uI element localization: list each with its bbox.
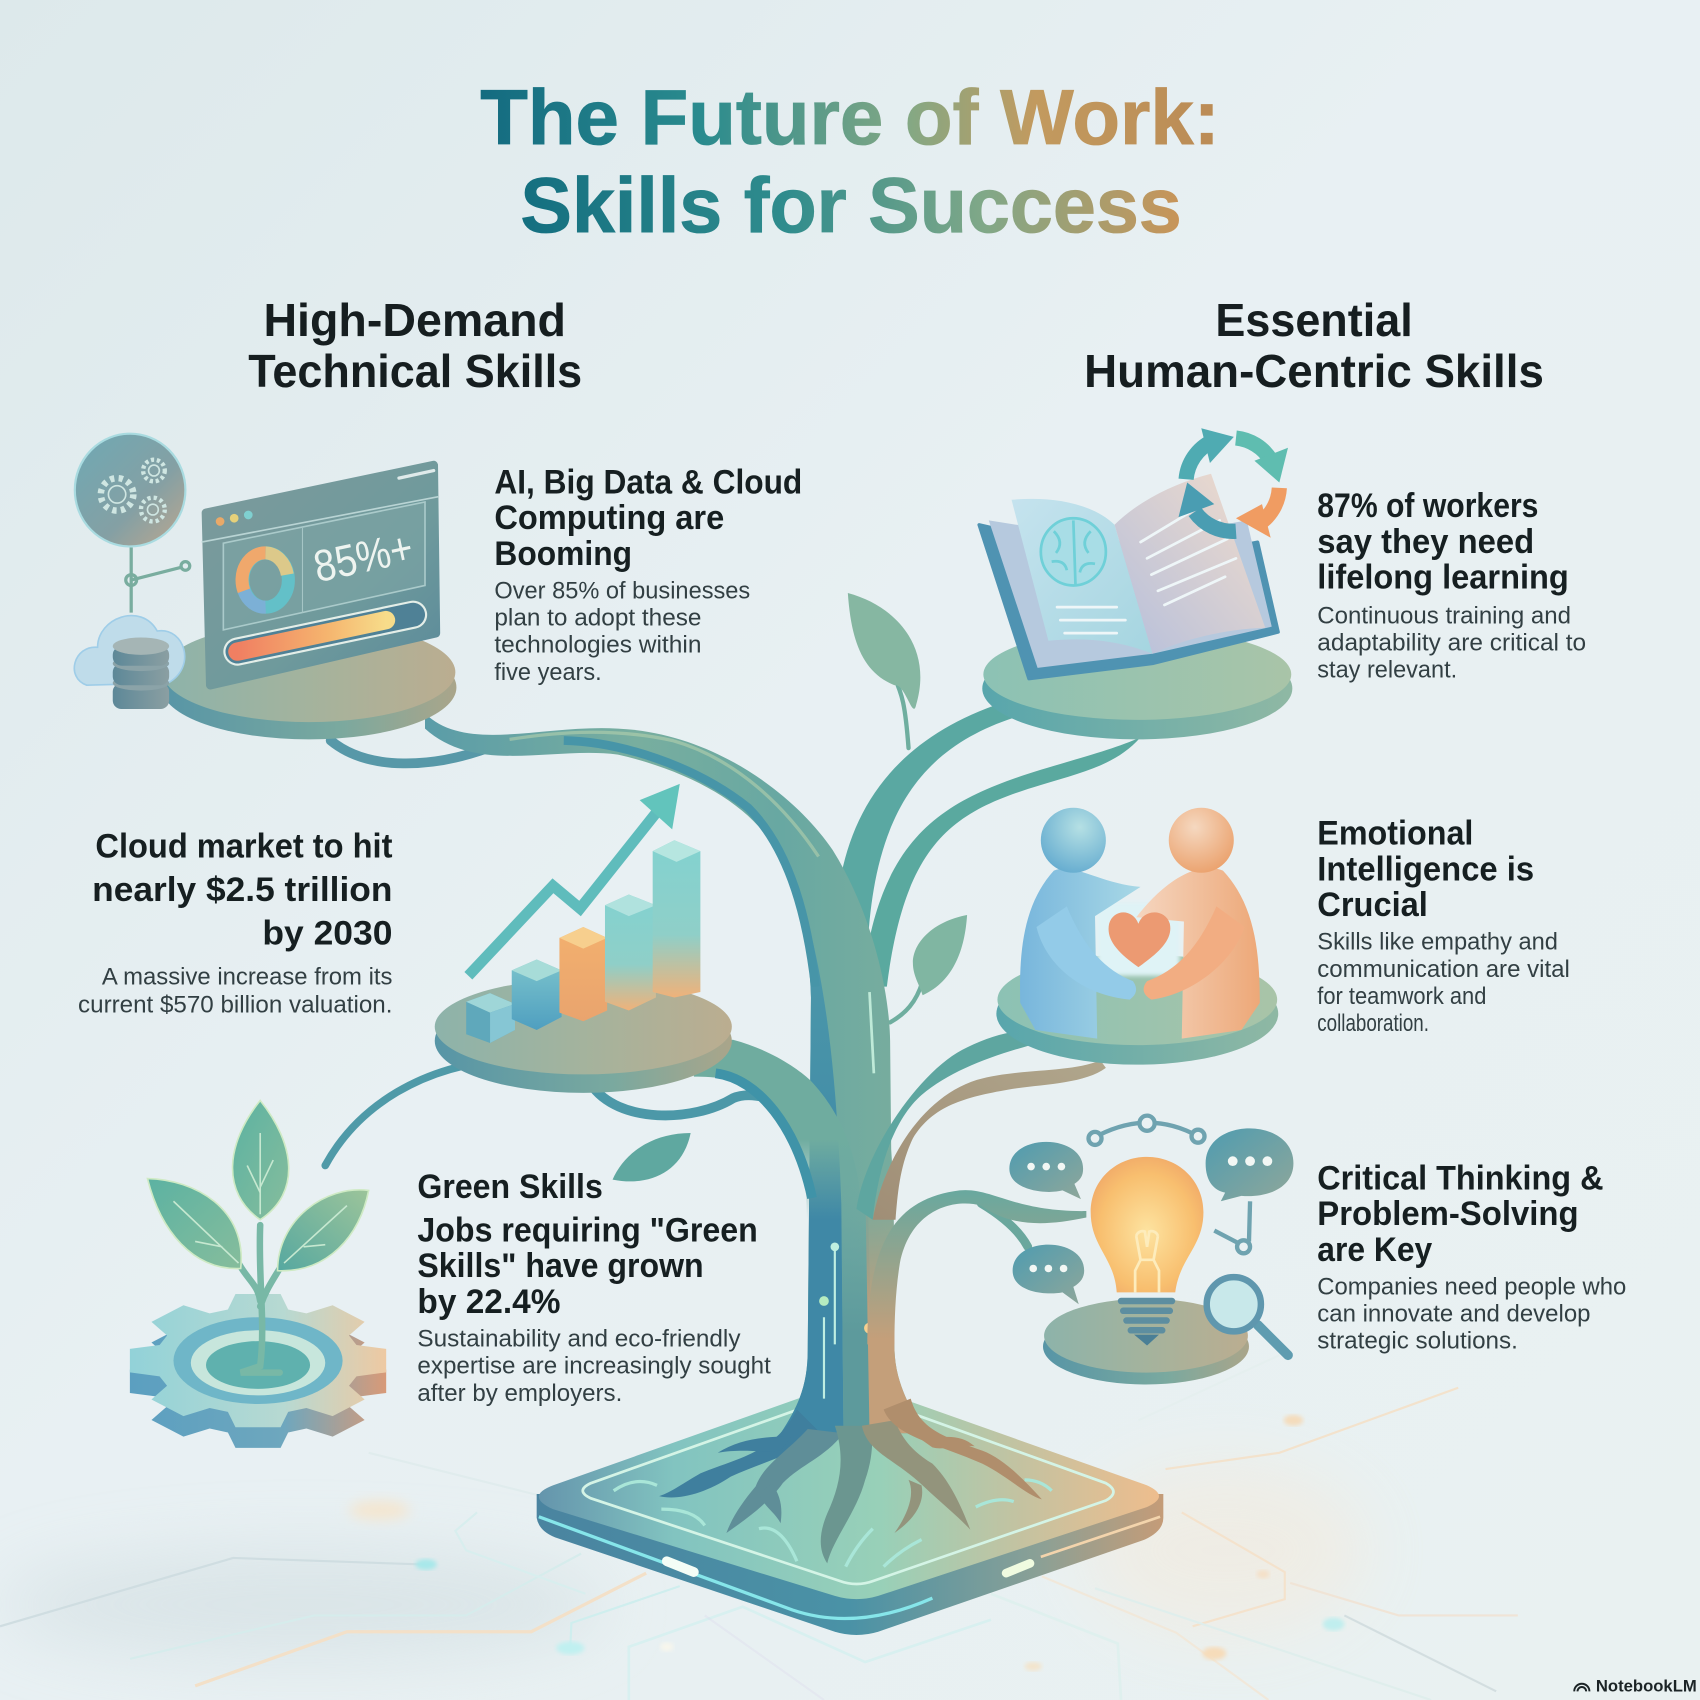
icon: cloud with database [74, 616, 185, 709]
text: lifelong learning: say they need [1317, 523, 1534, 561]
icon: network nodes [1089, 1116, 1250, 1253]
icon: open book [979, 474, 1278, 679]
branch platform disc [435, 979, 732, 1093]
text: green skills: Green Skills [417, 1168, 603, 1206]
text: AI, Big Data and Cloud: five years. [494, 659, 602, 686]
title: The Future of Work: [480, 73, 1220, 161]
heading: technical skills: Technical Skills [248, 345, 582, 397]
heading: human-centric skills: Essential [1215, 294, 1413, 346]
branch platform disc [1043, 1299, 1249, 1385]
heading: human-centric skills: Human-Centric Skills [1084, 345, 1544, 397]
donut chart [242, 553, 288, 607]
text: cloud market: by 2030 [262, 914, 392, 952]
text: critical thinking: can innovate and develop [1317, 1301, 1590, 1328]
text: lifelong learning: lifelong learning [1317, 559, 1569, 597]
decorative leaves [848, 593, 920, 709]
platform: technical AI dashboard [74, 434, 456, 739]
leaf: lower [613, 1133, 691, 1181]
NotebookLM logo: NotebookLM [1596, 1677, 1697, 1695]
text: cloud market: A massive increase from its [102, 963, 393, 990]
text: emotional intelligence: Skills like empathy and [1317, 929, 1558, 956]
text: critical thinking: are Key [1317, 1231, 1433, 1269]
stem [239, 1225, 280, 1373]
text: lifelong learning: adaptability are critical to [1317, 630, 1586, 657]
tree branches behind trunk [325, 678, 1028, 1247]
text: critical thinking: strategic solutions. [1317, 1328, 1518, 1355]
bar chart [466, 840, 700, 1043]
glowing circuit nodes [349, 1415, 1344, 1671]
text: lifelong learning: stay relevant. [1317, 657, 1457, 684]
text: cloud market: Cloud market to hit [95, 828, 393, 866]
title [480, 73, 1220, 249]
trunk blue band [775, 850, 843, 1433]
text: emotional intelligence [1317, 815, 1570, 1037]
text: emotional intelligence: communication are vital [1317, 956, 1570, 983]
branch platform disc [162, 622, 456, 739]
icon: magnifier [1207, 1277, 1288, 1355]
text: green skills: by 22.4% [417, 1283, 561, 1321]
platform: critical thinking [1009, 1116, 1293, 1385]
base platform [537, 1383, 1163, 1635]
text: emotional intelligence: Crucial [1317, 886, 1428, 924]
branch platform disc [996, 954, 1278, 1065]
brain [1041, 518, 1106, 585]
text: emotional intelligence: Intelligence is [1317, 850, 1534, 888]
platform: lifelong learning book [979, 428, 1292, 739]
leaves [147, 1100, 369, 1271]
platform: market growth chart [435, 784, 732, 1093]
title: Skills for Success [520, 161, 1182, 249]
trunk brown band [865, 1182, 924, 1433]
text: critical thinking: Critical Thinking & [1317, 1159, 1604, 1197]
icon: sprout on gear [130, 1100, 386, 1448]
icon: two people holding heart [1020, 808, 1260, 1039]
85% stat: 85%+ [310, 523, 417, 592]
text: cloud market [78, 828, 393, 1019]
text: AI, Big Data and Cloud: Booming [494, 535, 632, 573]
text: green skills [417, 1168, 771, 1407]
text: critical thinking: Companies need people who [1317, 1274, 1626, 1301]
tree roots [659, 1399, 1042, 1563]
trunk middle band [841, 1182, 874, 1433]
text: AI, Big Data and Cloud: Over 85% of businesses [494, 577, 750, 604]
icon: light bulb [1091, 1157, 1203, 1345]
text: AI, Big Data and Cloud [494, 463, 802, 686]
icon: connector nodes [126, 548, 190, 613]
upper right branches [835, 703, 1141, 987]
text: cloud market: current $570 billion valuation. [78, 992, 392, 1019]
text: green skills: expertise are increasingly sought [417, 1353, 771, 1380]
text: lifelong learning [1317, 487, 1586, 684]
leaf: top [848, 593, 920, 709]
icon: cycle arrows [1179, 428, 1288, 538]
main branch body [425, 713, 924, 1433]
left platform branch [694, 1040, 861, 1220]
platform: emotional intelligence [996, 808, 1278, 1065]
leaf: middle [913, 915, 967, 995]
heading: technical skills: High-Demand [263, 294, 566, 346]
text: critical thinking [1317, 1159, 1626, 1355]
text: lifelong learning: 87% of workers [1317, 487, 1538, 525]
text: emotional intelligence: collaboration. [1317, 1010, 1429, 1037]
text: AI, Big Data and Cloud: Computing are [494, 499, 724, 537]
heading: technical skills [248, 294, 582, 397]
text: AI, Big Data and Cloud: plan to adopt these [494, 605, 701, 632]
text: lifelong learning: Continuous training and [1317, 602, 1571, 629]
text: green skills: Jobs requiring "Green [417, 1211, 758, 1249]
text: cloud market: nearly $2.5 trillion [92, 871, 392, 909]
text: emotional intelligence: Emotional [1317, 815, 1473, 853]
icon: speech bubbles [1009, 1128, 1293, 1304]
heading: human-centric skills [1084, 294, 1544, 397]
text: green skills: after by employers. [417, 1380, 622, 1407]
text: green skills: Skills" have grown [417, 1247, 704, 1285]
right platform branches [857, 1030, 1106, 1344]
text: AI, Big Data and Cloud: technologies within [494, 632, 701, 659]
icon: dashboard screen [202, 465, 439, 685]
progress bar [237, 615, 413, 652]
icon: gears orb [75, 434, 185, 546]
tree trunk and main branch [425, 713, 924, 1433]
text: emotional intelligence: for teamwork and [1317, 983, 1486, 1010]
text: AI, Big Data and Cloud: AI, Big Data & Cloud [494, 463, 802, 501]
circuit lines on floor [0, 1355, 1518, 1700]
branch platform disc [982, 629, 1292, 739]
text: green skills: Sustainability and eco-friendly [417, 1326, 741, 1353]
gear base [130, 1294, 386, 1448]
text: critical thinking: Problem-Solving [1317, 1195, 1579, 1233]
arrow: growth trend [468, 784, 680, 976]
